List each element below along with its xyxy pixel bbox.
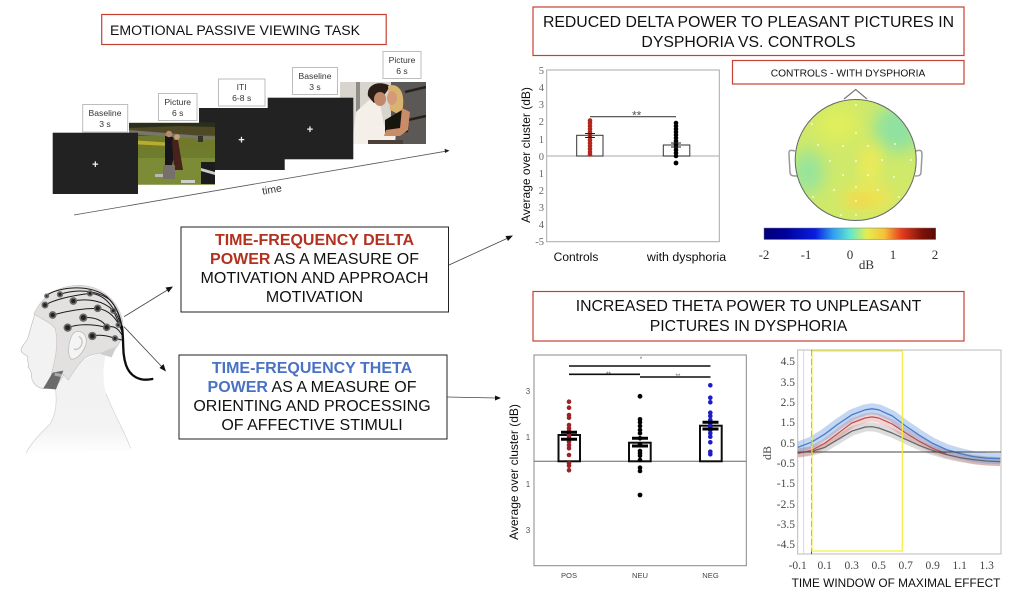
x axis ticks: -0.1 <box>789 560 807 572</box>
text box: theta power: POWER AS A MEASURE OF <box>208 379 417 396</box>
bar: with dysphoria <box>663 145 690 156</box>
x axis ticks: 0.3 <box>845 560 859 572</box>
right ear <box>915 150 922 176</box>
heading: controls with dysphoria: CONTROLS - WITH DYSPHORIA <box>771 68 925 80</box>
wires <box>45 288 123 340</box>
neck and shoulders <box>26 350 131 455</box>
x axis title: TIME WINDOW OF MAXIMAL EFFECT <box>792 576 1000 590</box>
y axis ticks: 2 <box>539 186 544 197</box>
heading: reduced delta power: REDUCED DELTA POWER TO PLEASANT PICTURES IN <box>543 14 954 31</box>
electrodes <box>42 291 120 341</box>
bar: NEU <box>629 443 651 461</box>
heading: reduced delta power <box>533 7 964 56</box>
fixation screen: ITI <box>199 108 285 170</box>
cap <box>34 285 123 380</box>
title: emotional passive viewing task <box>102 14 386 44</box>
bar chart: theta power by valence: ** <box>606 372 611 378</box>
label: baseline 3 s: 3 s <box>99 119 111 129</box>
heading: increased theta power: INCREASED THETA POWER TO UNPLEASANT <box>576 298 922 315</box>
significance brackets <box>569 366 710 377</box>
y axis label: Average over cluster (dB) <box>507 404 521 540</box>
y axis ticks: 5 <box>539 66 544 77</box>
text box: delta power: POWER AS A MEASURE OF <box>210 251 419 268</box>
error bars <box>585 133 681 147</box>
red band and curve <box>798 417 1000 462</box>
x axis ticks <box>789 560 994 572</box>
arrow: theta box to bar chart <box>447 396 501 400</box>
label: baseline 3 s <box>292 68 338 94</box>
y axis ticks: -0.5 <box>777 458 795 470</box>
heading: reduced delta power: DYSPHORIA VS. CONTROLS <box>641 34 856 51</box>
bar chart: delta power controls vs dysphoria: with dysphoria <box>646 250 726 264</box>
label: picture 6 s: Picture <box>164 97 191 107</box>
picture: couple embracing <box>340 82 426 144</box>
cable <box>122 327 152 380</box>
label: ITI 6-8 s: 6-8 s <box>232 93 251 103</box>
y axis ticks: 2.5 <box>781 397 795 409</box>
line chart: time course <box>760 350 1001 590</box>
picture: cemetery couple <box>129 123 215 185</box>
face <box>21 314 67 389</box>
y axis ticks: 3 <box>539 100 544 111</box>
colour bar labels: -1 <box>801 247 811 262</box>
fixation screen: baseline 1 <box>53 133 138 194</box>
y axis ticks: 3 <box>526 387 531 396</box>
y axis ticks: 0.5 <box>781 438 795 450</box>
title: emotional passive viewing task: EMOTIONAL PASSIVE VIEWING TASK <box>110 22 361 38</box>
heading: controls with dysphoria <box>732 60 964 84</box>
x labels: Controls <box>554 250 598 264</box>
bar chart: delta power controls vs dysphoria: ** <box>632 108 642 122</box>
bar chart: theta power by valence <box>507 355 746 580</box>
label: baseline 3 s: Baseline <box>299 71 332 81</box>
y axis ticks: -4.5 <box>777 539 795 551</box>
label: ITI 6-8 s: ITI <box>237 82 247 92</box>
y axis ticks: 2 <box>539 117 544 128</box>
y axis ticks: 0 <box>539 152 544 163</box>
heading: increased theta power <box>533 292 964 341</box>
text box: delta power: MOTIVATION AND APPROACH <box>201 270 428 287</box>
stimulus onset dashed line <box>810 350 812 554</box>
y axis ticks: 3 <box>539 203 544 214</box>
dots: controls <box>588 118 592 157</box>
y axis ticks: 1 <box>539 135 544 146</box>
grey band and curve <box>798 427 1000 462</box>
significance bracket <box>590 116 676 118</box>
x axis ticks: 0.5 <box>872 560 886 572</box>
x axis ticks: 1.3 <box>980 560 994 572</box>
heading: increased theta power: PICTURES IN DYSPHORIA <box>650 318 848 335</box>
bar chart: delta power controls vs dysphoria <box>519 66 726 264</box>
y axis ticks: -2.5 <box>777 499 795 511</box>
bar chart: theta power by valence: * <box>640 357 643 363</box>
label: picture 6 s: Picture <box>389 55 416 65</box>
colour bar labels: 0 <box>847 247 853 262</box>
y axis ticks: 1 <box>539 169 544 180</box>
fixation crosses: + <box>307 124 313 136</box>
label: ITI 6-8 s <box>218 79 265 106</box>
blue band and curve <box>798 409 1000 459</box>
text box: theta power: ORIENTING AND PROCESSING <box>193 398 431 415</box>
bar: NEG <box>700 426 722 461</box>
y axis ticks: 4 <box>539 83 545 94</box>
colour bar labels: dB <box>859 257 874 272</box>
bar: controls <box>577 135 603 156</box>
chin strap <box>43 371 63 389</box>
fixation screen: baseline 2 <box>268 98 353 159</box>
y axis ticks: 1 <box>526 433 531 442</box>
x labels <box>561 571 719 580</box>
arrow: cap to delta box <box>124 286 173 317</box>
dots: POS <box>567 399 571 473</box>
text box: delta power: MOTIVATION <box>266 289 363 306</box>
fixation crosses: + <box>238 134 245 146</box>
arrow: delta box to bar chart <box>449 236 513 265</box>
colour bar labels: 1 <box>890 247 896 262</box>
x axis ticks: 0.7 <box>899 560 913 572</box>
colour bar labels: -2 <box>759 247 769 262</box>
label: baseline 3 s <box>83 104 128 132</box>
time window highlight <box>812 351 902 551</box>
colour bar labels: 2 <box>932 247 938 262</box>
label: picture 6 s: 6 s <box>396 66 408 76</box>
left ear <box>789 150 797 176</box>
text box: delta power: TIME-FREQUENCY DELTA <box>215 232 414 249</box>
arrow: cap to theta box <box>124 327 166 372</box>
label: picture 6 s: 6 s <box>172 108 183 118</box>
dots: NEG <box>708 383 713 457</box>
y axis ticks: 1 <box>526 480 531 489</box>
y axis ticks: 3 <box>526 526 531 535</box>
bar chart: theta power by valence: ** <box>676 374 681 380</box>
fixation crosses: + <box>92 159 99 171</box>
x axis ticks: 0.9 <box>926 560 940 572</box>
confidence bands and curves <box>798 409 1000 462</box>
x labels: NEU <box>632 571 648 580</box>
colour bar <box>764 228 936 240</box>
ear <box>69 331 86 359</box>
nose <box>844 90 867 99</box>
y axis ticks <box>526 387 531 535</box>
bar: POS <box>558 435 580 461</box>
y axis ticks: 3.5 <box>781 377 795 389</box>
x labels: NEG <box>702 571 719 580</box>
electrode markers <box>811 104 912 216</box>
text box: delta power <box>181 227 448 312</box>
dots: with dysphoria <box>674 121 678 165</box>
topographic map <box>759 90 938 272</box>
arrow: time axis <box>74 149 450 215</box>
label: picture 6 s <box>383 52 421 78</box>
x axis ticks: 1.1 <box>953 560 967 572</box>
y axis label: Average over cluster (dB) <box>519 87 533 223</box>
y axis ticks: -5 <box>535 237 544 248</box>
error bars <box>561 422 718 446</box>
y axis ticks <box>777 356 795 551</box>
y axis ticks: 1.5 <box>781 417 795 429</box>
text box: theta power: OF AFFECTIVE STIMULI <box>221 417 403 434</box>
y axis label: dB <box>760 446 774 460</box>
arrow: time axis: time <box>261 182 283 198</box>
text box: theta power: TIME-FREQUENCY THETA <box>212 360 413 377</box>
y axis ticks: 4 <box>539 220 545 231</box>
y axis ticks: -1.5 <box>777 478 795 490</box>
y axis ticks: 4.5 <box>781 356 795 368</box>
scalp field <box>792 99 922 221</box>
text box: theta power <box>179 355 447 439</box>
label: picture 6 s <box>158 94 197 120</box>
label: baseline 3 s: Baseline <box>89 108 122 118</box>
x axis ticks: 0.1 <box>818 560 832 572</box>
dots: NEU <box>638 394 642 497</box>
illustration: head with EEG cap <box>21 285 152 455</box>
label: baseline 3 s: 3 s <box>309 82 321 92</box>
fixation crosses <box>92 124 313 171</box>
y axis ticks: -3.5 <box>777 519 795 531</box>
y axis ticks <box>535 66 545 248</box>
colour bar labels <box>759 247 938 272</box>
x labels: POS <box>561 571 577 580</box>
task sequence diagram <box>53 52 426 194</box>
